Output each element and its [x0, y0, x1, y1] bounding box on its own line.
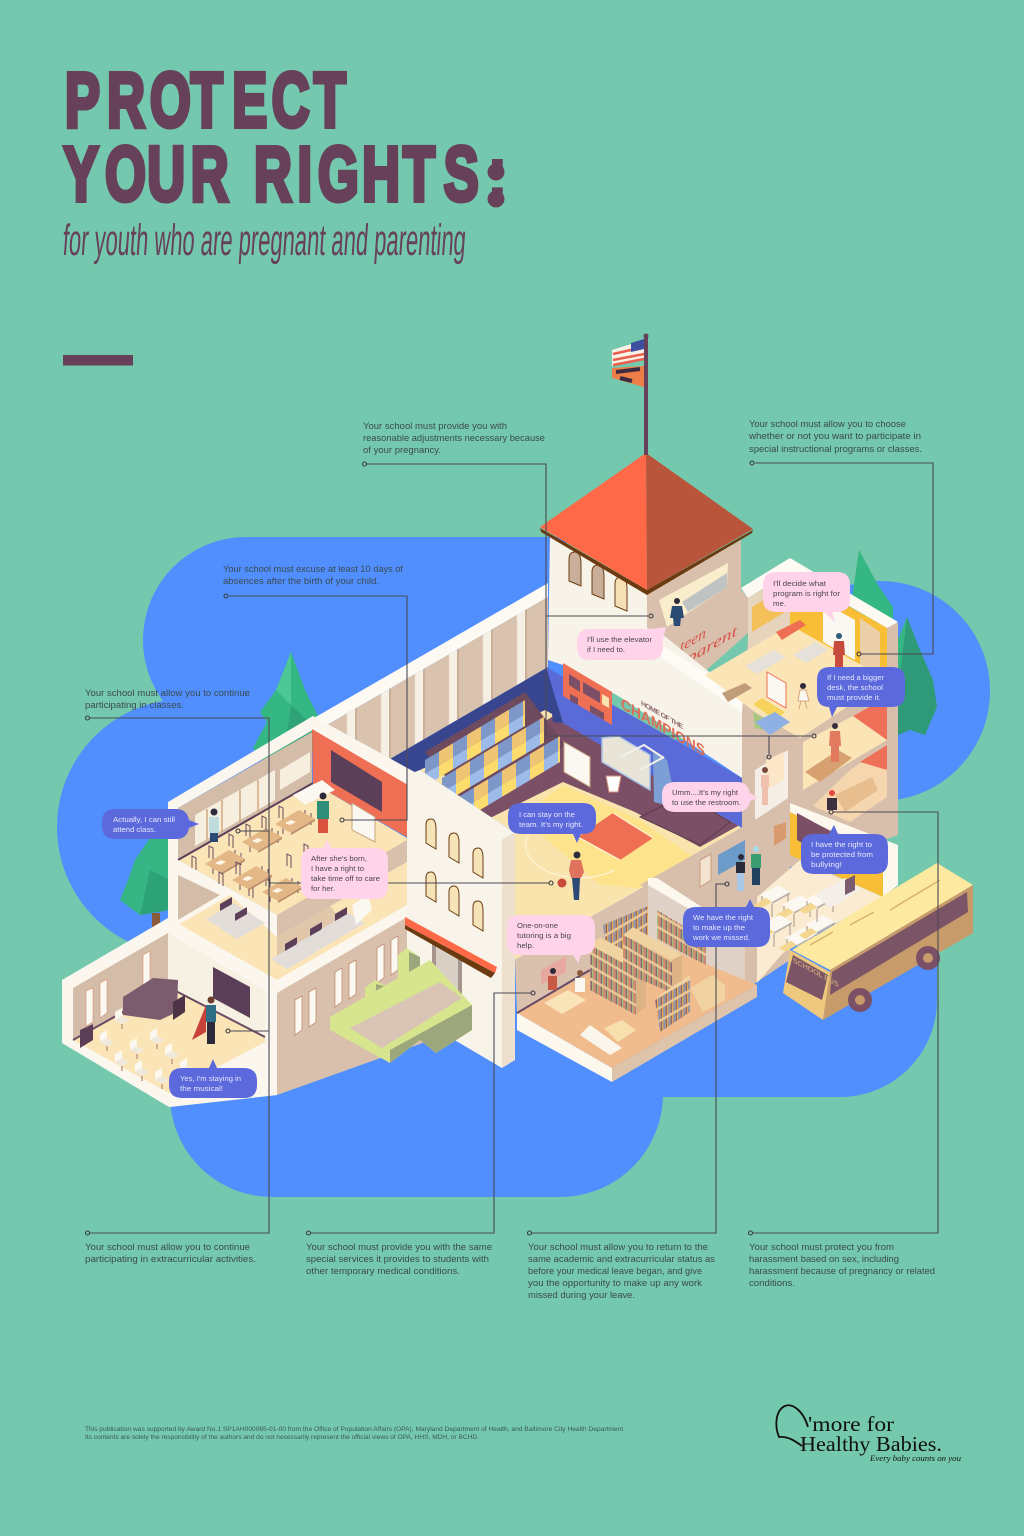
elementary classroom top floor — [705, 558, 898, 738]
speech bubble: time off: take time off to care — [311, 874, 380, 883]
text block: continue classes: participating in classes. — [85, 700, 184, 711]
figure: child running — [798, 683, 809, 709]
speech bubble: bullying: I have the right to — [811, 840, 872, 849]
text block: reasonable adjustments: of your pregnancy. — [363, 445, 441, 456]
text block: return after leave — [528, 1242, 715, 1301]
whiteboard and basketball hoop — [564, 736, 677, 808]
figure: two hallway students — [736, 846, 761, 891]
tree: right front — [898, 617, 937, 735]
speech bubble: program: me. — [773, 599, 786, 608]
title — [64, 56, 506, 217]
footer disclaimer: This publication was supported by Award No.1 SP1AH000065-01-00 from the Office of Population Affairs (OPA), Maryland Department of Health, and Baltimore City Health Department. — [85, 1426, 625, 1433]
music room — [62, 918, 277, 1107]
text block: excused absences — [223, 564, 403, 587]
figure: desk student — [829, 723, 841, 762]
text block: reasonable adjustments — [363, 421, 545, 456]
text block: special services — [306, 1242, 492, 1277]
rooms on the right column — [755, 697, 887, 822]
speech bubble: tutoring: help. — [517, 941, 534, 950]
speech bubble: bullying — [801, 825, 888, 874]
speech bubble: time off — [301, 840, 388, 899]
text block: special services: other temporary medical conditions. — [306, 1266, 460, 1277]
callout lines — [86, 461, 938, 1235]
line: adjustments — [362, 462, 816, 759]
speech bubble: bigger desk — [817, 667, 905, 717]
green entrance steps — [330, 948, 472, 1063]
text block: return after leave: Your school must allow you to return to the — [528, 1242, 708, 1253]
speech bubble: attend class: Actually, I can still — [113, 815, 175, 824]
text block: harassment: conditions. — [749, 1278, 795, 1289]
speech bubble: tutoring: tutoring is a big — [517, 931, 571, 940]
footer disclaimer — [85, 1426, 625, 1441]
text block: reasonable adjustments: Your school must provide you with — [363, 421, 507, 432]
tree: lower left — [120, 838, 170, 928]
text block: harassment: harassment based on sex, including — [749, 1254, 899, 1265]
text block: choose programs: Your school must allow you to choose — [749, 419, 906, 430]
text block: extracurricular: Your school must allow you to continue — [85, 1242, 250, 1253]
speech bubble: program — [763, 572, 850, 622]
logo: B'more for Healthy Babies: 'more for — [808, 1412, 894, 1436]
text block: excused absences: absences after the birth of your child. — [223, 576, 379, 587]
tree: right rear — [850, 550, 893, 640]
text block: extracurricular — [85, 1242, 256, 1265]
text block: excused absences: Your school must excuse at least 10 days of — [223, 564, 403, 575]
front classroom left wing: walls and floor — [168, 716, 420, 1095]
figure: elevator student — [670, 598, 684, 626]
building: tan right column — [742, 620, 898, 870]
speech bubble: time off: After she's born, — [311, 854, 367, 863]
line: classes and extracurricular — [86, 716, 553, 1235]
figure: library students — [548, 968, 585, 992]
text block: return after leave: before your medical leave began, and give — [528, 1266, 702, 1277]
scoreboard — [563, 663, 612, 725]
speech bubble: team: team. It's my right. — [519, 820, 583, 829]
speech bubble: bullying: be protected from — [811, 850, 873, 859]
tower wall with arched windows — [548, 535, 753, 778]
bleacher seats — [425, 692, 565, 822]
tan teen parent wall — [647, 540, 748, 673]
speech bubble: musical: the musical! — [180, 1084, 223, 1093]
entrance awning and door — [405, 917, 497, 1005]
speech bubble: time off: I have a right to — [311, 864, 364, 873]
home of the champions lettering: CHAMPIONS — [621, 695, 705, 761]
subtitle: for youth who are pregnant and parenting — [61, 216, 468, 265]
speech bubble: team: I can stay on the — [519, 810, 575, 819]
logo: B'more for Healthy Babies: Every baby counts on you — [869, 1453, 961, 1463]
speech bubble: bigger desk: If I need a bigger — [827, 673, 884, 682]
text block: harassment: harassment because of pregnancy or related — [749, 1266, 935, 1277]
blue background blob — [57, 537, 990, 1197]
text block: special services: Your school must provide you with the same — [306, 1242, 492, 1253]
text block: choose programs: whether or not you want to participate in — [748, 431, 921, 442]
text block: reasonable adjustments: reasonable adjustments necessary because — [363, 433, 545, 444]
text block: continue classes: Your school must allow you to continue — [85, 688, 250, 699]
tree: upper left — [253, 652, 322, 770]
library and lower right tan wall — [515, 800, 790, 1082]
speech bubble: make up work: to make up the — [693, 923, 745, 932]
speech bubble: elevator: if I need to. — [587, 645, 625, 654]
speech bubble: make up work: We have the right — [693, 913, 754, 922]
speech bubble: program: program is right for — [773, 589, 840, 598]
text block: extracurricular: participating in extracurricular activities. — [85, 1254, 256, 1265]
entrance wall with arched windows — [407, 770, 515, 1068]
school bus — [783, 863, 973, 1020]
figure: computer student — [827, 790, 837, 810]
line: medical conditions — [306, 991, 535, 1235]
tan teen parent wall: teen — [680, 624, 706, 656]
speech bubble: make up work: work we missed. — [692, 933, 750, 942]
school bus: SCHOOL BUS — [793, 955, 839, 989]
accent bar — [63, 355, 133, 366]
text block: harassment — [749, 1242, 935, 1289]
speech bubble: elevator — [577, 627, 666, 660]
text block: return after leave: missed during your leave. — [528, 1290, 635, 1301]
speech bubble: restroom: to use the restroom. — [672, 798, 741, 807]
speech bubble: restroom — [662, 782, 758, 812]
text block: harassment: Your school must protect you from — [749, 1242, 894, 1253]
speech bubble: attend class — [102, 809, 199, 839]
line: absences — [224, 594, 407, 822]
figure: elementary teacher — [833, 633, 845, 667]
title: YOUR RIGHTS: — [64, 130, 506, 217]
speech bubble: musical — [169, 1059, 257, 1098]
classroom desks — [192, 780, 375, 903]
text block: return after leave: same academic and extracurricular status as — [528, 1254, 715, 1265]
speech bubble: time off: for her. — [311, 884, 335, 893]
figure: pregnant basketball student — [558, 852, 584, 900]
building: left rim and back hall wall — [307, 583, 563, 805]
figure: standing classroom student — [317, 792, 329, 833]
figure: restroom student — [761, 767, 769, 805]
flag pole and flags — [612, 334, 648, 455]
figure: performer with cape — [192, 996, 216, 1044]
speech bubble: musical: Yes, I'm staying in — [180, 1074, 241, 1083]
line: programs — [750, 461, 933, 656]
tan front wall with windows — [277, 917, 445, 1095]
title: PROTECT — [65, 56, 346, 143]
tan teen parent wall: parent — [686, 622, 738, 668]
text block: choose programs — [748, 419, 922, 455]
text block: continue classes — [85, 688, 250, 711]
tower roof — [540, 453, 753, 595]
footer disclaimer: Its contents are solely the responsibility of the authors and do not necessarily represent the official views of OPA, HHS, MDH, or BCHD. — [85, 1434, 479, 1441]
text block: choose programs: special instructional programs or classes. — [749, 444, 922, 455]
speech bubble: tutoring: One-on-one — [517, 921, 558, 930]
figure: teen at window — [209, 808, 219, 842]
home of the champions lettering: HOME OF THE — [641, 699, 683, 731]
students and staff figures — [192, 598, 845, 1044]
speech bubble: restroom: Umm....It's my right — [672, 788, 739, 797]
gym blue wall with banner — [546, 667, 742, 828]
speech bubble: tutoring — [507, 915, 595, 963]
speech bubble: elevator: I'll use the elevator — [587, 635, 652, 644]
computer lab — [178, 862, 407, 980]
speech bubble: attend class: attend class. — [113, 825, 156, 834]
logo: B'more for Healthy Babies — [776, 1405, 961, 1463]
speech bubble: program: I'll decide what — [773, 579, 827, 588]
speech bubble: team — [508, 803, 596, 843]
speech bubble: bullying: bullying! — [811, 860, 842, 869]
speech bubble: bigger desk: must provide it. — [827, 693, 881, 702]
logo: B'more for Healthy Babies: Healthy Babies. — [800, 1432, 942, 1456]
text block: special services: special services it provides to students with — [306, 1254, 489, 1265]
speech bubble: bigger desk: desk, the school — [827, 683, 883, 692]
gym floor — [420, 710, 745, 960]
lower right classroom — [700, 803, 898, 983]
line: harassment — [748, 810, 938, 1235]
line: return to status — [528, 882, 729, 1235]
speech bubble: make up work — [683, 899, 770, 947]
text block: return after leave: you the opportunity to make up any work — [528, 1278, 702, 1289]
